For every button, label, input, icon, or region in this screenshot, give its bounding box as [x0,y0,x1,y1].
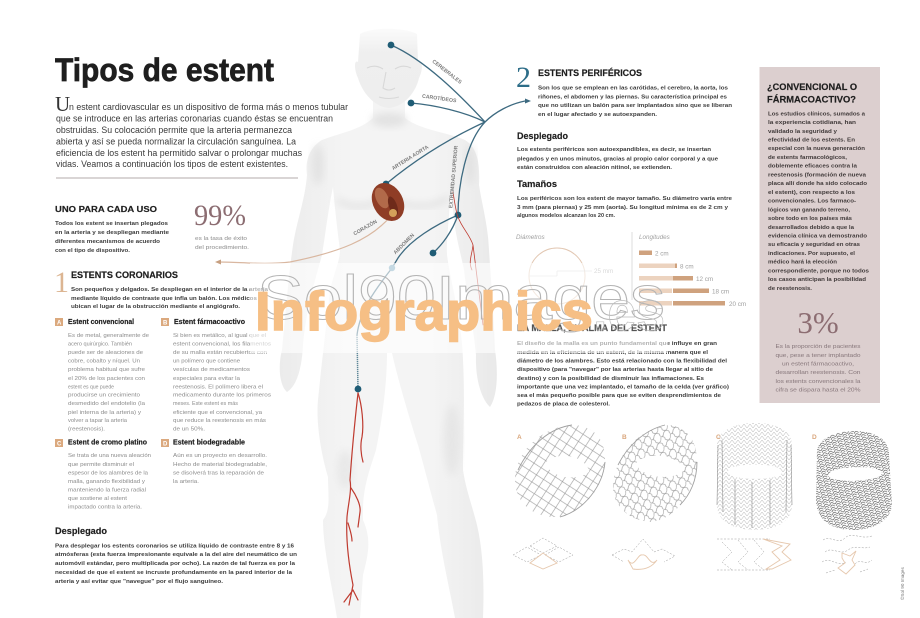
diagram: diámetros: 25 mm [594,268,613,275]
stat: 3%: desarrollan reestenosis. Con [776,370,860,376]
panel: estent convencional: volver a tapar la arteria [68,418,128,424]
panel: estent convencional: problema habitual que sufre [68,367,145,373]
sidebar body text: doblemente eficaces contra la [768,164,858,170]
panel: tamaños: Los periféricos son los estent de mayor tamaño. Su diámetro varía entre [517,196,733,202]
sidebar body text: la experiencia cotidiana, han [768,120,856,126]
vessel labels: ABDOMEN [393,233,416,256]
panel: estent de cromo platino: que sostiene al estent [68,496,127,502]
panel: uno para cada uso: Todos los estent se insertan plegados [55,221,169,227]
panel: la malla text: pedazos de placa de colesterol. [517,402,610,408]
vessel labels: CEREBRALES [431,59,463,86]
stent B [613,425,697,522]
panel: estent de cromo platino: que permite disminuir el [68,462,134,468]
vessel labels [352,59,463,256]
panel: estent biodegradable: Estent biodegradable [173,440,245,446]
panel: estent fármacoactivo: de su malla están recubiertos con [173,350,267,356]
panel: la malla text: importante que una vez implantado, el tamaño de la celda (ver gráfico) [517,384,729,390]
heading: estents coronarios: Son pequeños y delgados. Se despliegan en el interior de la arteria [71,287,269,293]
panel: desplegado periféricos: Desplegado [517,131,568,142]
chart: longitudes [639,234,746,308]
panel: desplegado coronarios: automóvil estándar, pero multiplicada por ocho). La razón de tal fuerza es por la [55,561,296,567]
panel: desplegado periféricos: plegados y en unos minutos, gracias al propio calor corporal y a que [517,156,719,162]
panel: estent convencional: desmedido del endotelio (la [68,401,146,407]
panel: desplegado coronarios: arteria y así evitar que "navegue" por el flujo sanguíneo. [55,579,223,585]
vessel labels: CORAZÓN [352,217,379,237]
chart: longitudes: 8 cm [680,264,694,270]
panel: estent biodegradable [161,439,267,485]
diagram: diámetros: Diámetros [516,234,546,241]
panel: desplegado coronarios: atmósferas (esta fuerza impresionante equivale a la del aire del neumático de un [55,552,297,558]
heading: estents coronarios: 1 [54,266,69,299]
panel: estent de cromo platino: C [57,442,62,448]
panel: tamaños: 3 mm (para piernas) y 25 mm (aorta). Su longitud mínima es de 2 cm y [517,205,729,211]
panel: estent de cromo platino: Se trata de una nueva aleación [68,453,151,459]
stent D [812,431,892,530]
intro paragraph: obstruidas. Su colocación permite que la arteria permanezca [56,125,292,135]
intro paragraph: vidas. Veamos a continuación los tipos de estent existentes. [56,159,288,169]
panel: estent fármacoactivo: meses. Este estent es más [173,401,238,407]
heading: estents coronarios: ESTENTS CORONARIOS [71,270,179,281]
panel: estent de cromo platino: impactado contra la arteria. [68,504,142,510]
heading: estents periféricos: ESTENTS PERIFÉRICOS [538,67,643,79]
sidebar body text: placa allí donde ha sido colocado [768,181,867,187]
panel: desplegado coronarios: necesidad de que el estent se incruste profundamente en la pared interior de la [55,570,293,576]
sidebar body text: efectividad de los estents. En [768,138,855,144]
sidebar body text: evidencia clínica va demostrando [768,234,867,240]
cell diagram D [822,535,872,574]
panel: estent fármacoactivo: Si bien es metálico, al igual que el [173,333,266,339]
panel: estent convencional: acero quirúrgico. También [68,342,132,348]
panel: desplegado coronarios: Para desplegar los estents coronarios se utiliza líquido de contraste entre 8 y 16 [55,544,295,550]
panel: estent fármacoactivo: que reduce la reestenosis en más [173,418,266,424]
chart: longitudes: Longitudes [639,234,671,241]
panel: estent de cromo platino: malla, ganando flexibilidad y [68,479,145,485]
panel: estent de cromo platino: manteniendo la fuerza radial [68,488,146,494]
panel: estent fármacoactivo: reestenosis. El polímero libera el [173,384,263,390]
chart: longitudes: 12 cm [696,276,713,283]
panel: uno para cada uso: con el tipo de dispositivo. [55,248,130,254]
intro paragraph: abierta y así se pueda normalizar la circulación sanguínea. La [56,136,296,146]
panel: estent convencional: puede ser de aleaciones de [68,350,143,356]
stat: 3%: Es la proporción de pacientes [776,344,861,350]
heading: la malla: LA MALLA, EL ALMA DEL ESTENT [517,323,668,333]
chart: longitudes: 18 cm [712,288,729,296]
heading: estents periféricos: 2 [516,61,531,94]
panel: estent de cromo platino: espesor de los alambres de la [68,470,149,476]
panel: uno para cada uso: UNO PARA CADA USO [55,204,157,214]
panel: la malla text [517,341,729,408]
stent D: D [812,434,817,441]
face features [367,66,411,98]
sidebar body text: los casos anticipan la posibilidad [768,277,866,283]
sidebar heading: ¿CONVENCIONAL O [767,82,858,93]
heading: estents coronarios [54,266,269,310]
panel: estent biodegradable: D [163,442,168,448]
sidebar body text: lógicos van ganando terreno, [768,207,850,213]
sidebar body text: médico hará la elección [768,260,837,266]
panel: estent fármacoactivo: medicamento durante los primeros [173,392,271,398]
sidebar body text: Los estudios clínicos, sumados a [768,111,866,117]
sidebar body text: de reestenosis. [768,286,812,292]
panel: tamaños: algunos modelos alcanzan los 20 cm. [517,213,615,219]
heading: estents coronarios: mediante líquido de contraste que infla un balón. Los médicos [71,296,258,302]
panel: estent biodegradable: Hecho de material biodegradable, [173,462,267,468]
human body figure [280,29,497,618]
sidebar body text: desarrollados debido a que la [768,225,855,231]
stent B: B [622,434,627,441]
panel: tamaños [517,179,733,219]
panel: desplegado coronarios: Desplegado [55,526,107,537]
sidebar body text: correspondiente, porque no todos [768,268,870,274]
cell diagram C [717,539,791,570]
stent C: C [716,434,721,441]
panel: estent fármacoactivo: de un 50%. [173,426,205,432]
sidebar heading [767,82,858,106]
panel: estent biodegradable: la arteria. [173,479,199,485]
sidebar body text: validado la seguridad y [768,129,838,135]
heading: estents coronarios: ubican el lugar de la obstrucción mediante el angiógrafo. [71,304,240,310]
panel: estent fármacoactivo: especiales para evitar la [173,376,241,382]
panel: estent convencional: A [57,320,62,326]
vessels: blue arteries [355,42,531,392]
panel: estent fármacoactivo: eficiente que el convencional, ya [173,410,263,416]
vessels: red arteries [344,192,483,605]
panel: estent fármacoactivo: Estent fármacoactivo [174,319,245,326]
panel: estent convencional: producirse un crecimiento [68,392,140,398]
panel: estent convencional: cobre, cobalto y níquel. Un [68,358,140,364]
panel: uno para cada uso: diferentes mecanismos de acuerdo [55,239,160,245]
panel: estent fármacoactivo: estent convencional, los filamentos [173,342,271,348]
stat: 99%: es la tasa de éxito [195,236,247,242]
panel: estent convencional [55,318,149,432]
panel: estent de cromo platino [55,439,151,510]
sidebar body text: el estent), con respecto a los [768,190,856,196]
panel: uno para cada uso: en la arteria y se despliegan mediante [55,230,170,236]
stent A: A [517,434,522,441]
watermark: Infographics.es: Infographics [255,280,593,342]
panel: estent convencional: estent es que puede [68,384,114,390]
heading: estents periféricos: en el lugar afectado y se autoexpanden. [538,112,657,118]
intro paragraph: eficiencia de los estent ha permitido salvar o prolongar muchas [56,148,302,158]
stat: 3% [776,305,861,394]
heading: estents periféricos: que no utilizan un balón para ser implantados sino que se liberan [538,103,732,109]
chart: longitudes: 20 cm [729,301,746,308]
panel: la malla text: diámetro de los alambres. Esto está relacionado con la flexibilidad del [517,358,727,364]
sidebar heading: FÁRMACOACTIVO? [767,94,856,106]
stent C [716,423,792,530]
panel: la malla text: dispositivo (para "navegar" por las arterias hasta llegar al sitio de [517,367,714,373]
stat: 99% [194,199,249,251]
panel: estent convencional: el 20% de los pacientes con [68,376,145,382]
intro paragraph: U [55,92,70,116]
vessel labels: CAROTÍDEOS [422,92,457,104]
sidebar body text: de estents farmacológicos, [768,155,847,161]
cell diagram A [513,538,573,569]
arrow: corazón callout [215,217,390,264]
intro paragraph [55,92,348,169]
watermark: Sol90Images: Sol90Images [257,264,665,333]
panel: la malla text: El diseño de la malla es un punto fundamental que influye en gran [517,341,717,347]
stat: 3%: un estent fármacoactivo, [782,362,854,368]
vessel labels: EXTREMIDAD SUPERIOR [448,145,460,208]
sidebar body text: convencionales. Los farmaco- [768,199,856,205]
heading: estents periféricos: Son los que se emplean en las carótidas, el cerebro, la aorta, los [538,86,729,92]
heading: estents periféricos: riñones, el abdomen y las piernas. Su característica principal es [538,94,728,100]
watermark: Infographics.es: .es [593,280,665,342]
stat: 99%: del procedimiento. [195,245,249,251]
stat: 3%: cifra se dispara hasta el 20% [776,388,861,394]
panel: estent fármacoactivo: B [163,320,168,326]
stat: 3%: los estents convencionales la [776,379,861,385]
stat: 3%: 3% [797,305,839,340]
panel: desplegado periféricos [517,131,719,171]
panel: uno para cada uso [55,204,170,254]
vessel labels: ARTERIA AORTA [391,144,430,172]
icon: heart [365,177,411,227]
panel: la malla text: sea el más pequeño posible para que se eviten desprendimientos de [517,393,722,399]
sidebar body text: especial con la nueva generación [768,146,865,152]
sidebar body text: su eficacia y seguridad en otras [768,242,861,248]
panel: estent convencional: Estent convencional [68,319,134,326]
cell diagram B [612,539,675,569]
chart: longitudes: 2 cm [655,250,669,258]
panel: desplegado periféricos: Los estents periféricos son autoexpandibles, es decir, se insertan [517,147,711,153]
panel: estent convencional: (reestenosis). [68,426,105,432]
credit: ©Sol 90 Images [899,567,905,600]
panel: estent biodegradable: se disolverá tras la reparación de [173,470,264,476]
title: Tipos de estent [55,52,274,88]
intro paragraph: que se introduce en las arterias coronarias cuando éstas se encuentran [56,114,333,124]
panel: estent de cromo platino: Estent de cromo platino [68,440,147,446]
heading: estents periféricos [516,61,732,118]
stat: 99%: 99% [194,199,246,232]
panel: estent convencional: piel interna de la arteria) y [68,410,141,416]
sidebar body text [768,111,870,292]
panel: estent fármacoactivo [161,318,271,432]
panel: estent convencional: Es de metal, generalmente de [68,333,149,339]
diagram: diámetros [516,234,613,304]
panel: la malla text: medida en la eficiencia de un estent, de la misma manera que el [517,350,708,356]
sidebar body text: indicaciones. Por supuesto, el [768,251,855,257]
sidebar body text: sobre todo en los países más [768,216,853,222]
stent A [515,425,605,517]
panel: desplegado coronarios [55,526,297,585]
panel: desplegado periféricos: están construidos con aleación nitinol, se extienden. [517,165,672,171]
stat: 3%: que, pese a tener implantado [776,353,861,359]
panel: estent fármacoactivo: un polímero que contiene [173,358,240,364]
panel: estent fármacoactivo: vesículas de medicamentos [173,367,250,373]
panel: estent biodegradable: Aún es un proyecto en desarrollo. [173,453,267,459]
panel: tamaños: Tamaños [517,179,557,190]
intro paragraph: n estent cardiovascular es un dispositivo de forma más o menos tubular [69,102,348,112]
sidebar body text: reestenosis (formación de nueva [768,172,867,178]
sidebar panel [760,67,880,403]
panel: la malla text: destino) y con la posibilidad de disminuir las inflamaciones. Es [517,376,705,382]
